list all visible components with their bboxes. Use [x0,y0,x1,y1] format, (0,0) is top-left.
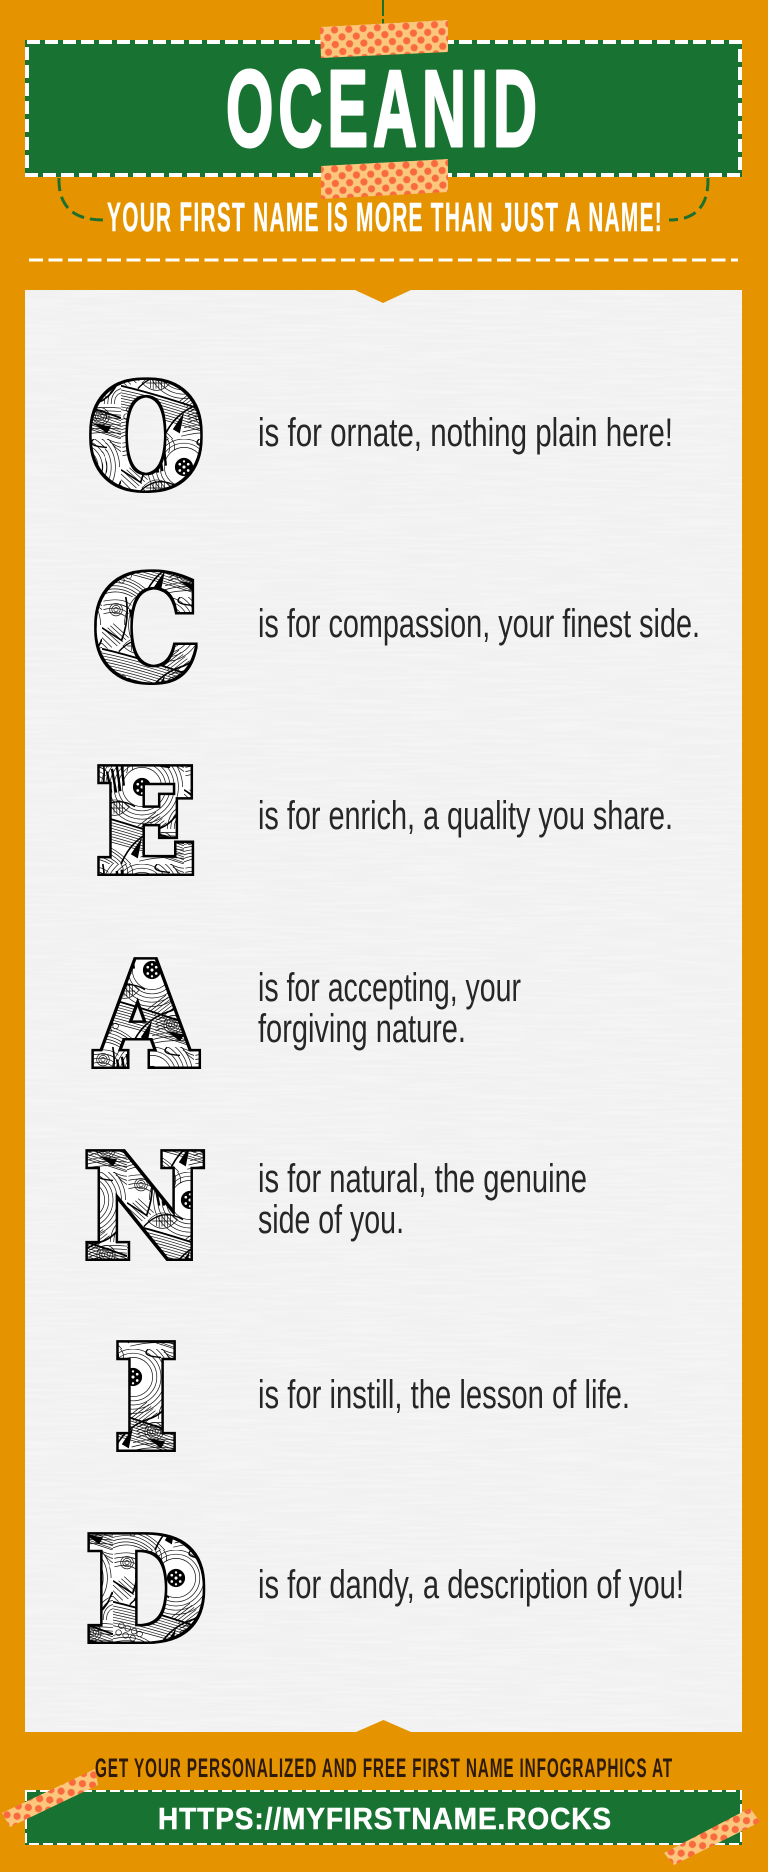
row: A [96,935,521,1096]
row: I [116,1318,630,1479]
row: E [97,742,673,903]
row: N [86,1127,587,1288]
dashed divider [29,258,738,262]
hanging string [382,0,384,24]
text A: forgiving nature. [258,1007,466,1051]
text A: is for accepting, your [258,966,521,1010]
tape: footer right [664,1808,760,1865]
dashed bracket: right [669,178,708,220]
letter C: C [94,549,198,710]
letter N: N [86,1127,204,1288]
letter D: D [87,1510,205,1671]
text N: is for natural, the genuine [258,1157,587,1201]
tape: footer left [2,1769,98,1827]
letter O: O [90,357,202,518]
text I: is for instill, the lesson of life. [258,1373,630,1417]
title banner [25,40,742,177]
row: O [90,357,673,518]
panel: name letters [25,290,742,1732]
letter E: E [97,742,195,903]
row: C [94,549,700,710]
tape: bottom of banner [321,159,448,199]
footer url: HTTPS://MYFIRSTNAME.ROCKS [158,1801,612,1836]
row: D [87,1510,684,1671]
text N [258,1157,587,1242]
text N: side of you. [258,1198,404,1242]
footer url banner [25,1790,742,1845]
text A [258,966,521,1051]
letter A: A [96,935,196,1096]
tape: top of banner [320,20,448,58]
dashed bracket: left [59,178,103,220]
letter I: I [116,1318,176,1479]
